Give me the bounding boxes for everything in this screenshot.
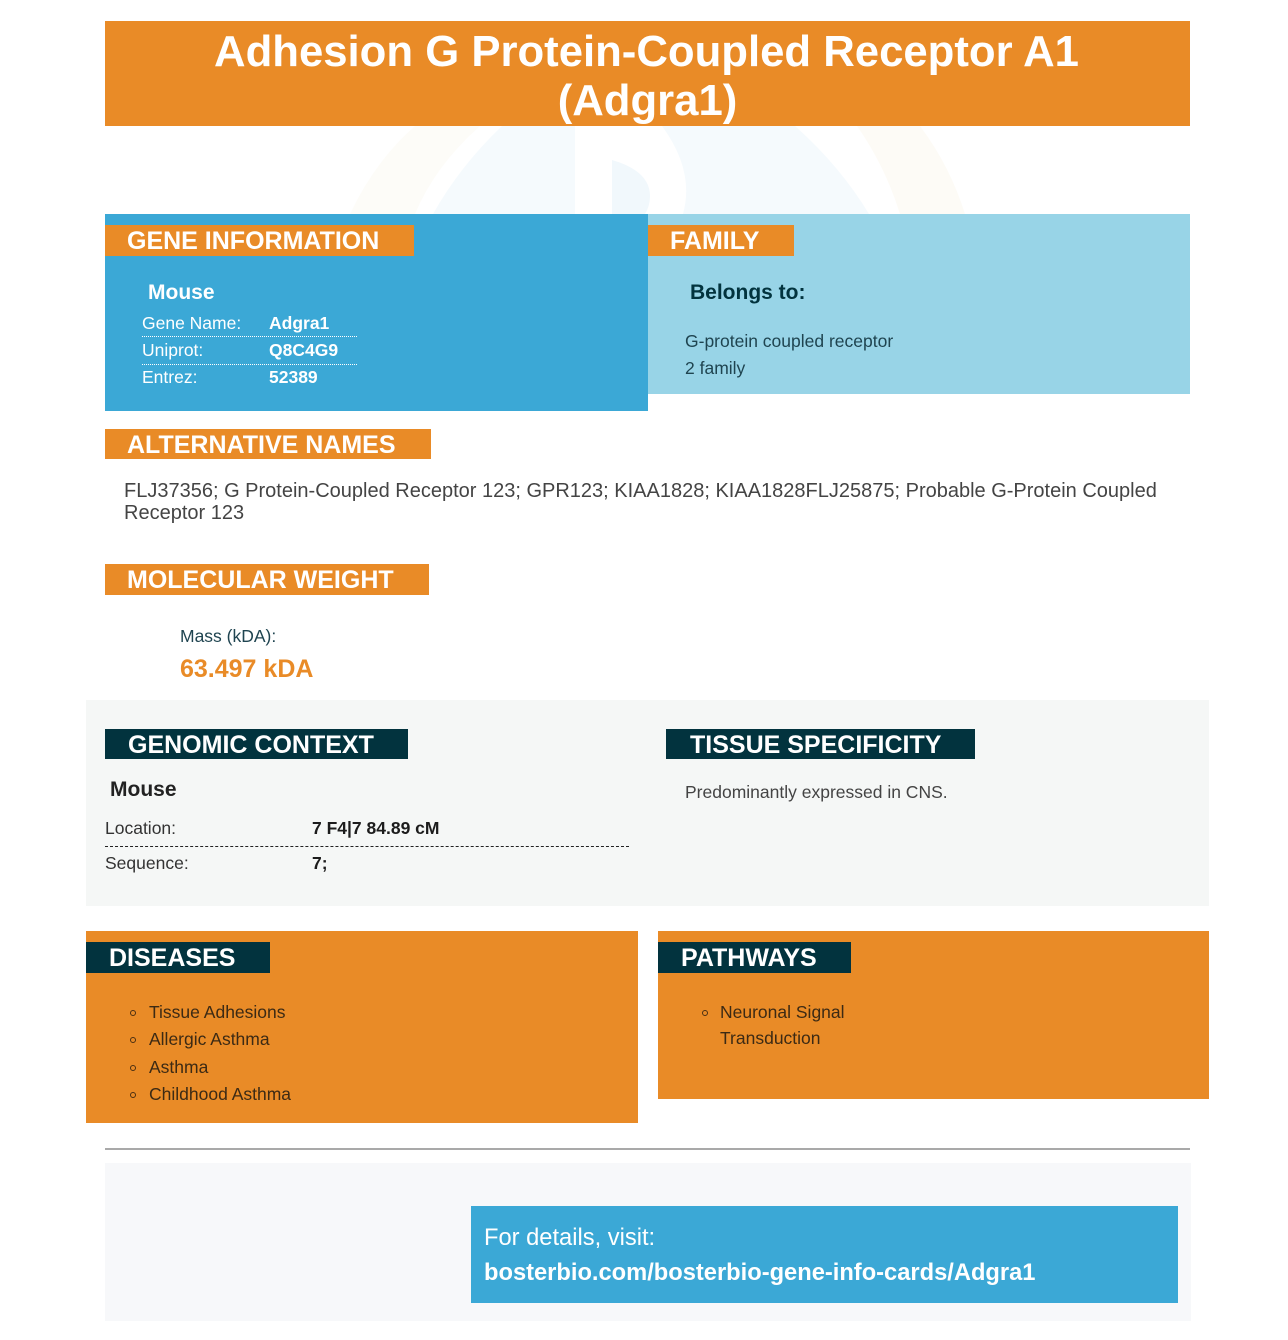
disease list: Childhood Asthma	[149, 1084, 291, 1104]
heading: family	[648, 225, 794, 256]
panel: family	[648, 214, 1190, 394]
disease list: Asthma	[149, 1057, 208, 1077]
call to action box	[471, 1206, 1178, 1303]
heading: molecular weight: MOLECULAR WEIGHT	[127, 566, 394, 594]
family text: G-protein coupled receptor	[685, 331, 893, 351]
species label: Mouse	[148, 281, 215, 304]
visit label: For details, visit:	[484, 1225, 655, 1251]
disease list	[130, 1002, 291, 1104]
sequence row	[105, 853, 328, 873]
title banner: Adhesion G Protein-Coupled Receptor A1	[214, 27, 1079, 76]
sequence row: 7;	[312, 853, 328, 873]
title banner	[105, 21, 1190, 126]
uniprot row	[142, 339, 357, 365]
gene name row: Gene Name:	[142, 313, 241, 333]
sequence row: Sequence:	[105, 853, 189, 873]
belongs to label: Belongs to:	[690, 281, 806, 304]
heading: diseases	[86, 942, 270, 973]
panel: gene information	[105, 214, 648, 411]
tissue specificity text: Predominantly expressed in CNS.	[685, 782, 948, 802]
heading: pathways: PATHWAYS	[681, 944, 817, 972]
pathway list	[702, 1002, 845, 1048]
title banner: (Adgra1)	[558, 76, 737, 125]
pathway list: Neuronal Signal	[720, 1002, 845, 1022]
family text: 2 family	[685, 358, 745, 378]
heading: tissue specificity: TISSUE SPECIFICITY	[690, 731, 941, 759]
heading: pathways	[658, 942, 851, 973]
uniprot row: Q8C4G9	[269, 340, 338, 360]
entrez row: Entrez:	[142, 367, 197, 387]
location row: Location:	[105, 818, 176, 838]
alternative names text	[124, 480, 1157, 524]
heading: genomic context: GENOMIC CONTEXT	[128, 731, 374, 759]
location row	[105, 817, 629, 847]
heading: alternative names: ALTERNATIVE NAMES	[127, 431, 396, 459]
disease list: Allergic Asthma	[149, 1029, 270, 1049]
entrez row	[142, 367, 318, 387]
location row: 7 F4|7 84.89 cM	[312, 818, 439, 838]
panel: genomic context and tissue specificity	[86, 700, 1209, 906]
species label: Mouse	[110, 778, 177, 801]
panel: diseases	[86, 931, 638, 1123]
uniprot row: Uniprot:	[142, 340, 203, 360]
footer divider	[105, 1148, 1190, 1150]
mass value: 63.497 kDA	[180, 655, 313, 683]
entrez row: 52389	[269, 367, 318, 387]
heading: diseases: DISEASES	[109, 944, 235, 972]
panel: footer	[105, 1163, 1191, 1321]
pathway list: Transduction	[720, 1028, 821, 1048]
alternative names text: FLJ37356; G Protein-Coupled Receptor 123; GPR123; KIAA1828; KIAA1828FLJ25875; Probable G-Protein Coupled	[124, 480, 1157, 502]
mass label: Mass (kDA):	[180, 626, 276, 646]
heading: family: FAMILY	[670, 227, 759, 255]
gene name row: Adgra1	[269, 313, 329, 333]
alternative names text: Receptor 123	[124, 502, 244, 524]
panel: pathways	[658, 931, 1209, 1099]
heading: gene information: GENE INFORMATION	[127, 227, 379, 255]
family text	[685, 331, 893, 378]
url: bosterbio.com/bosterbio-gene-info-cards/Adgra1	[484, 1260, 1035, 1286]
disease list: Tissue Adhesions	[149, 1002, 286, 1022]
gene name row	[142, 312, 357, 337]
watermark logo	[434, 126, 964, 214]
